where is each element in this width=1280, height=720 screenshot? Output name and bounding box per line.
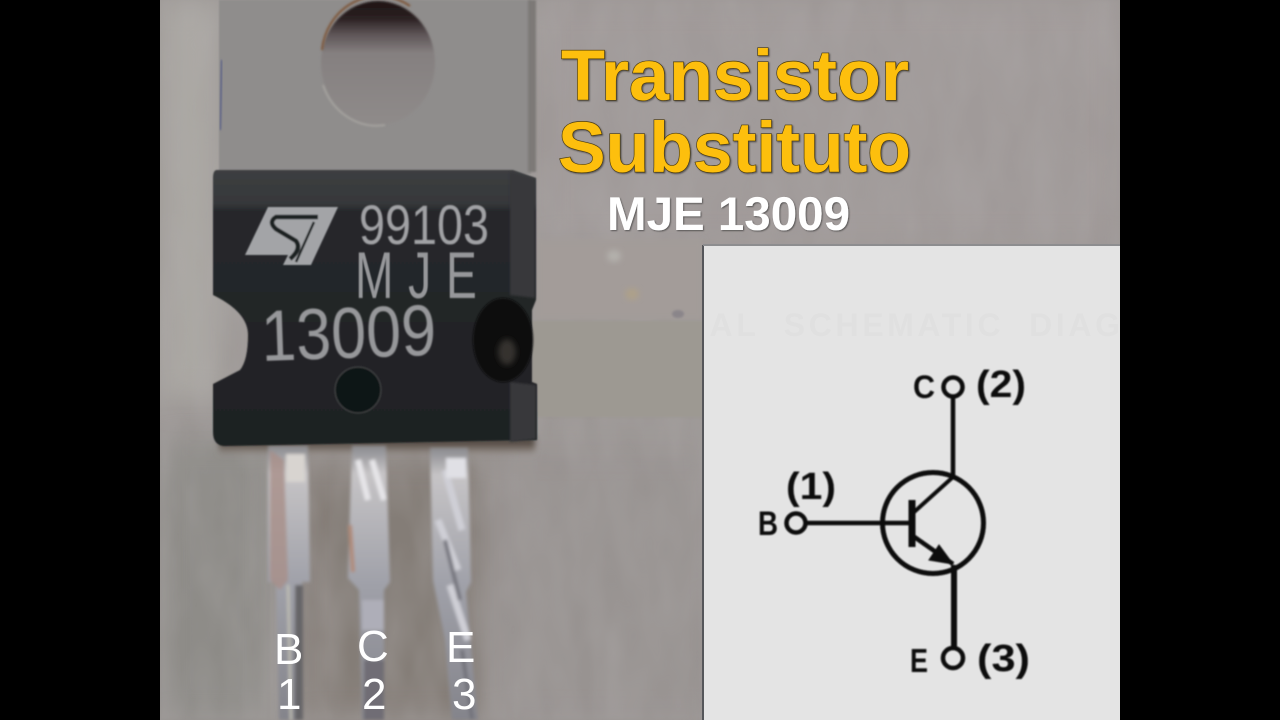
metal mounting tab with hole (219, 0, 536, 174)
schematic labels: (1) (786, 466, 836, 508)
terminal E (943, 648, 963, 668)
pin 2 label: 2 (362, 670, 386, 719)
package right side facet (510, 172, 536, 442)
emitter lead (951, 565, 957, 648)
transistor symbol (786, 378, 984, 668)
schematic labels: (2) (976, 364, 1026, 406)
schematic labels (758, 364, 1030, 680)
faded schematic heading: IAL SCHEMATIC DIAG (697, 307, 1120, 343)
transistor package (213, 170, 537, 446)
lead 1 (B) (268, 446, 310, 720)
terminal C (944, 378, 962, 396)
pin B label: B (274, 625, 303, 674)
printed marking: date code: 99103 (359, 193, 489, 256)
lead 2 (C) (348, 446, 390, 720)
base lead (805, 521, 912, 525)
collector lead (951, 397, 955, 477)
pin C label: C (357, 622, 389, 671)
printed marking: 13009: 13009 (260, 291, 437, 377)
pin 3 label: 3 (452, 670, 476, 719)
schematic labels: E (910, 642, 928, 679)
schematic labels: C (913, 369, 935, 405)
photo background: concrete surface (160, 0, 1120, 720)
subtitle: MJE 13009 (607, 187, 850, 240)
small moulding hole (335, 367, 381, 413)
leads: shadow zone (219, 438, 535, 456)
schematic labels: (3) (977, 638, 1030, 680)
title: Transistor (561, 37, 909, 116)
schematic labels: B (758, 505, 778, 543)
title: Substituto (558, 109, 911, 188)
pin E label: E (446, 623, 475, 672)
lighter retouched patch beside package (532, 321, 704, 417)
right notch dark hollow (473, 298, 533, 382)
lead 3 (E) (430, 448, 478, 720)
pin labels (274, 622, 476, 719)
pin 1 label: 1 (277, 670, 301, 719)
collector diagonal (913, 477, 953, 513)
base bar (908, 500, 916, 547)
terminal B (786, 514, 806, 532)
icon: ST logo (245, 207, 338, 265)
infographic canvas (160, 0, 1120, 720)
printed marking: MJE: MJE (355, 239, 491, 313)
title (558, 37, 911, 188)
panel: schematic diagram (697, 244, 1120, 720)
emitter diagonal with arrow (913, 536, 953, 564)
